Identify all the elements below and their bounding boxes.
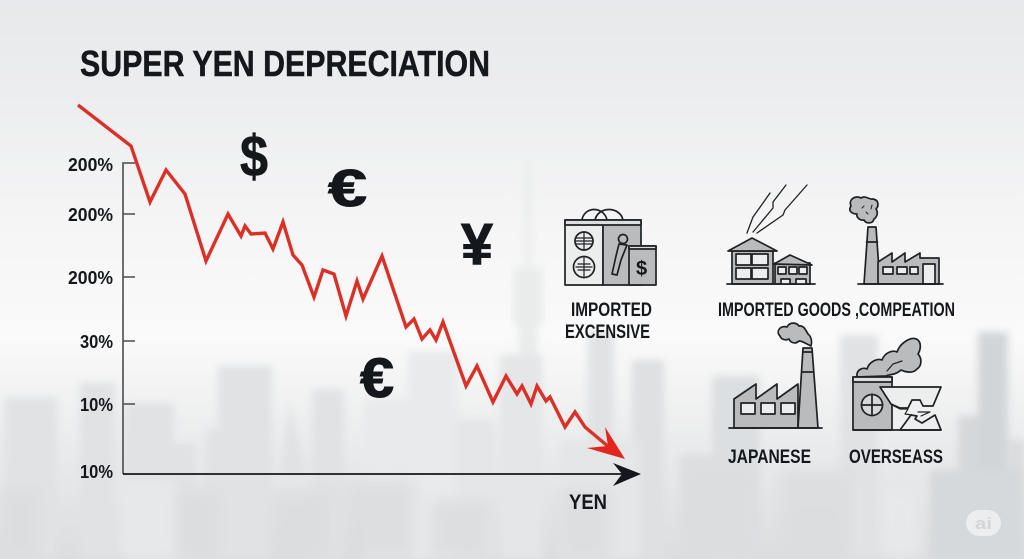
y axis labels: 200%	[68, 205, 113, 225]
icon: imported shopping bag: $	[636, 258, 647, 280]
y axis labels: 10%	[80, 395, 113, 415]
label: imported: IMPORTED	[571, 299, 652, 321]
currency symbols: ¥	[461, 212, 493, 277]
y axis with ticks	[123, 163, 135, 474]
blurred city skyline	[0, 160, 1024, 559]
watermark: ai badge	[966, 510, 1001, 536]
red declining line	[78, 105, 625, 459]
y axis labels: 10%	[80, 462, 113, 482]
title: SUPER YEN DEPRECIATION	[80, 43, 490, 84]
watermark: ai badge: ai	[975, 514, 992, 533]
x axis arrow	[123, 463, 641, 486]
y axis labels	[68, 155, 113, 482]
y axis labels: 200%	[68, 155, 113, 175]
icon: imported shopping bag	[565, 210, 656, 285]
currency symbols	[240, 124, 493, 409]
icon: factory with smoke	[850, 197, 943, 284]
x axis label: YEN	[569, 491, 607, 514]
label: excensive: EXCENSIVE	[565, 321, 650, 343]
currency symbols: €	[360, 346, 394, 409]
icon: houses with cracks	[727, 185, 815, 284]
y axis labels: 200%	[68, 268, 113, 288]
currency symbols: €	[328, 160, 367, 218]
icon: overseas factory and anvil	[853, 338, 941, 430]
currency symbols: $	[240, 124, 268, 189]
y axis labels: 30%	[80, 332, 113, 352]
label: overseass: OVERSEASS	[849, 446, 943, 468]
label: japanese: JAPANESE	[728, 446, 811, 468]
icon: japanese factory	[729, 323, 822, 428]
